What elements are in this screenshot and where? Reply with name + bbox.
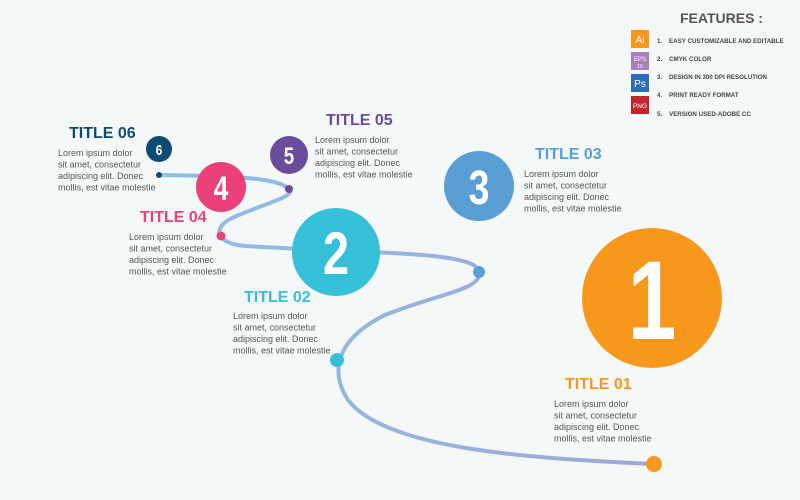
text 02: sit amet, consectetur xyxy=(233,322,316,332)
text 04: mollis, est vitae molestie xyxy=(129,266,227,276)
text 04: TITLE 04 xyxy=(140,209,207,226)
text 01: sit amet, consectetur xyxy=(554,410,637,420)
features: PNG xyxy=(633,103,647,110)
text 04 xyxy=(129,209,227,276)
text 03: mollis, est vitae molestie xyxy=(524,204,622,214)
circle 6: 6 xyxy=(156,142,163,158)
text 04: adipiscing elit. Donec xyxy=(129,255,215,265)
text 01: adipiscing elit. Donec xyxy=(554,422,640,432)
path line xyxy=(159,175,654,464)
features: Ps xyxy=(634,79,646,90)
text 01: mollis, est vitae molestie xyxy=(554,434,652,444)
text 06: mollis, est vitae molestie xyxy=(58,182,156,192)
text 04: sit amet, consectetur xyxy=(129,244,212,254)
circle 4: 4 xyxy=(214,170,228,208)
features xyxy=(631,10,784,118)
text 01: Lorem ipsum dolor xyxy=(554,399,629,409)
circle 4 xyxy=(196,162,246,212)
features: Ai xyxy=(636,35,644,46)
circle 5 xyxy=(270,136,308,174)
circle 3: 3 xyxy=(469,162,489,215)
text 05: adipiscing elit. Donec xyxy=(315,158,401,168)
circle 3 xyxy=(444,151,514,221)
text 05: sit amet, consectetur xyxy=(315,146,398,156)
text 05: Lorem ipsum dolor xyxy=(315,135,390,145)
text 06 xyxy=(58,125,156,192)
text 02: Lorem ipsum dolor xyxy=(233,311,308,321)
text 06: sit amet, consectetur xyxy=(58,160,141,170)
text 02: TITLE 02 xyxy=(244,289,311,306)
text 02 xyxy=(233,289,331,356)
features: 10 xyxy=(637,64,643,70)
features: FEATURES : xyxy=(680,10,763,26)
circle 2: 2 xyxy=(323,220,349,287)
text 03: TITLE 03 xyxy=(535,146,602,163)
text 05 xyxy=(315,112,413,180)
text 03 xyxy=(524,146,622,214)
text 02: adipiscing elit. Donec xyxy=(233,334,319,344)
circle 6 xyxy=(146,136,172,162)
features: 4. PRINT READY FORMAT xyxy=(657,92,739,99)
text 03: sit amet, consectetur xyxy=(524,180,607,190)
text 01 xyxy=(554,376,652,444)
features: 2. CMYK COLOR xyxy=(657,56,712,63)
dots xyxy=(156,172,662,472)
features: 1. EASY CUSTOMIZABLE AND EDITABLE xyxy=(657,38,784,45)
circle 5: 5 xyxy=(284,143,294,170)
circle 1: 1 xyxy=(628,239,676,364)
text 01: TITLE 01 xyxy=(565,376,632,393)
text 02: mollis, est vitae molestie xyxy=(233,346,331,356)
text 05: TITLE 05 xyxy=(326,112,393,129)
text 06: Lorem ipsum dolor xyxy=(58,148,133,158)
features: EPS xyxy=(634,57,646,63)
text 04: Lorem ipsum dolor xyxy=(129,232,204,242)
features: 3. DESIGN IN 300 DPI RESOLUTION xyxy=(657,74,768,81)
features: 5. VERSION USED-ADOBE CC xyxy=(657,111,751,118)
text 03: adipiscing elit. Donec xyxy=(524,192,610,202)
text 06: TITLE 06 xyxy=(69,125,136,142)
circle 1 xyxy=(582,228,722,368)
text 06: adipiscing elit. Donec xyxy=(58,171,144,181)
text 05: mollis, est vitae molestie xyxy=(315,170,413,180)
circle 2 xyxy=(292,208,380,296)
text 03: Lorem ipsum dolor xyxy=(524,169,599,179)
